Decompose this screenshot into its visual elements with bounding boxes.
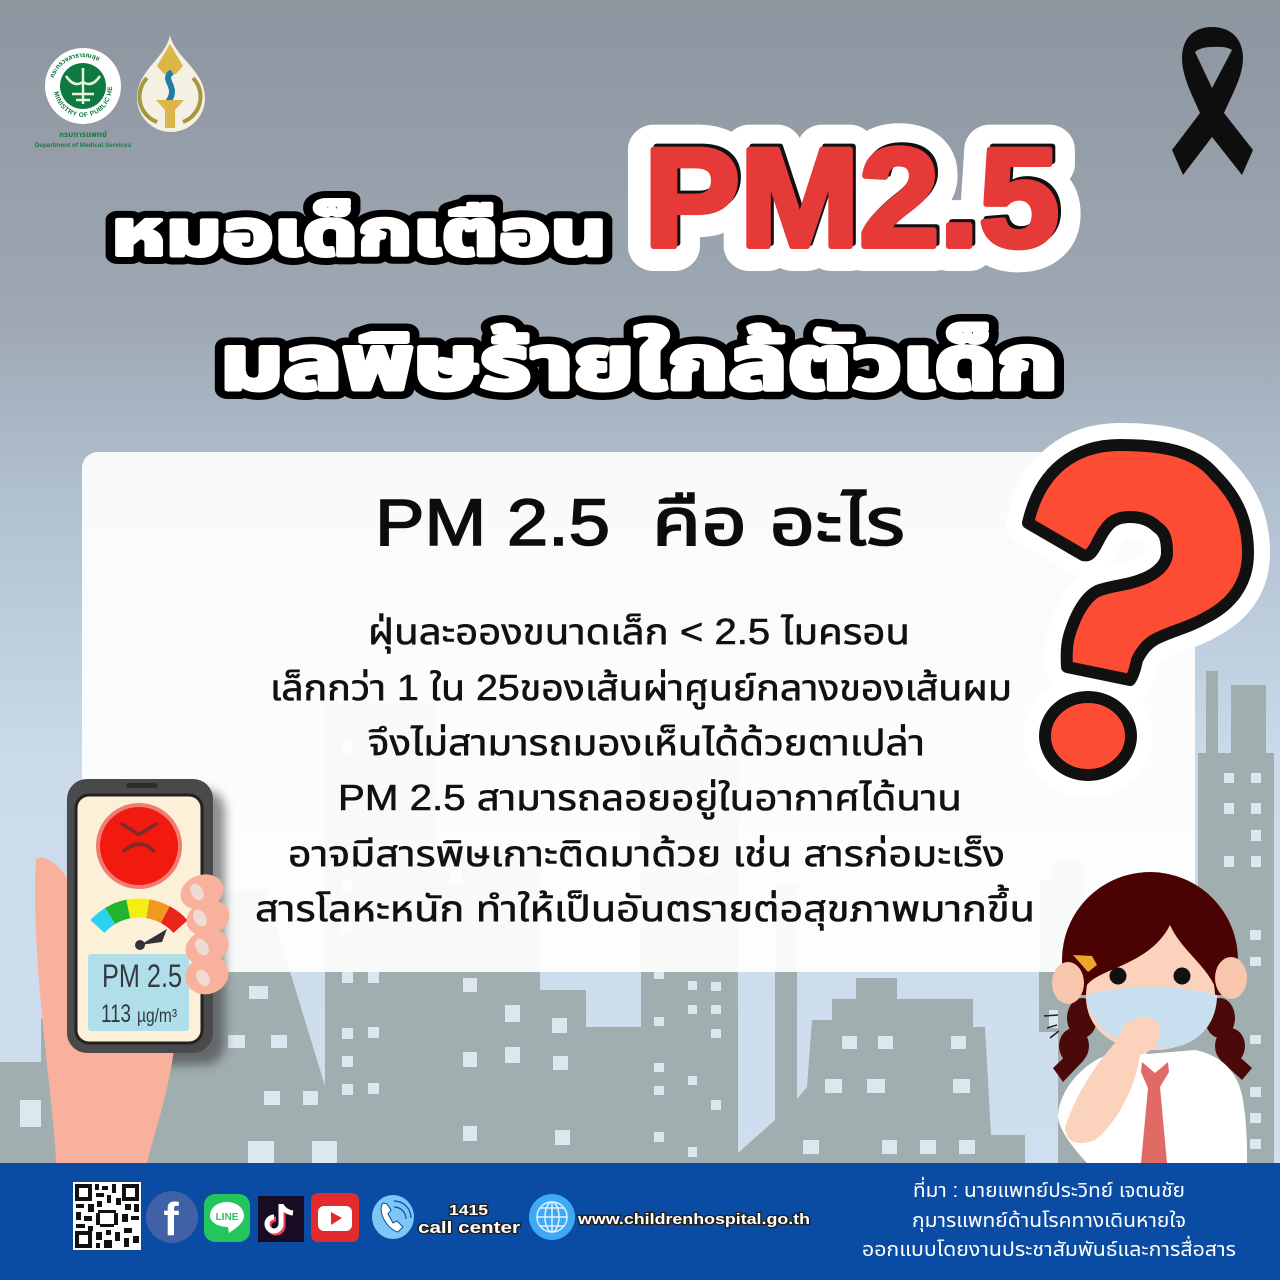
hand xyxy=(35,858,175,1163)
icon: facebook: f xyxy=(163,1193,179,1245)
reading text: µg/m³ xyxy=(137,1006,177,1027)
gauge needle xyxy=(135,929,167,950)
body text: สารโลหะหนัก ทำให้เป็นอันตรายต่อสุขภาพมากขึ้น xyxy=(255,884,1035,930)
icon: globe xyxy=(529,1194,575,1240)
body text xyxy=(255,611,1035,930)
title line 2: harmful pollution near children: มลพิษร้ายใกล้ตัวเด็ก xyxy=(220,321,1058,406)
reading text: PM 2.5 xyxy=(102,958,182,994)
phone shadow xyxy=(75,790,225,1065)
footer band xyxy=(0,1163,1280,1280)
source credit: กุมารแพทย์ด้านโรคทางเดินหายใจ xyxy=(912,1209,1186,1232)
shirt xyxy=(1058,1050,1247,1163)
icon: call center phone xyxy=(372,1195,414,1239)
body text: อาจมีสารพิษเกาะติดมาด้วย เช่น สารก่อมะเร็ง xyxy=(288,833,1005,874)
ears xyxy=(1052,962,1084,1004)
panel: PM 2.5 explanation xyxy=(82,452,1195,972)
reading box xyxy=(88,954,189,1031)
source credit: ออกแบบโดยงานประชาสัมพันธ์และการสื่อสาร xyxy=(862,1235,1236,1261)
reading text: 113 xyxy=(101,1000,131,1028)
title line 1: doctor warns: หมอเด็กเตือน xyxy=(111,197,607,269)
icon: YouTube xyxy=(311,1193,359,1242)
title: PM2.5: PM2.5 xyxy=(647,116,1062,273)
eyes xyxy=(1110,968,1126,984)
logo: Ministry of Public Health xyxy=(35,48,132,149)
icon: TikTok xyxy=(258,1196,304,1242)
website: www.childrenhospital.go.th xyxy=(577,1211,810,1228)
city skyline xyxy=(0,671,1274,1163)
cough lines xyxy=(1044,1015,1059,1038)
call center text: 1415 xyxy=(449,1202,488,1219)
title line 2: harmful pollution near children: มลพิษร้ายใกล้ตัวเด็ก xyxy=(220,321,1058,406)
air quality gauge xyxy=(97,908,181,926)
tie xyxy=(1141,1062,1169,1163)
hair clip xyxy=(1073,955,1097,972)
heading: what is PM 2.5: คือ อะไร xyxy=(652,485,905,559)
icon: black mourning ribbon xyxy=(1172,27,1253,175)
arm and hand xyxy=(1065,1017,1160,1143)
hair xyxy=(1062,872,1238,995)
icon: question mark xyxy=(1028,445,1248,775)
reading text xyxy=(101,958,182,1028)
illustration: girl with mask coughing xyxy=(1044,872,1252,1163)
body text: PM 2.5 สามารถลอยอยู่ในอากาศได้นาน xyxy=(338,777,962,819)
building windows xyxy=(20,740,1261,1163)
title line 1: doctor warns: หมอเด็กเตือน xyxy=(111,197,607,269)
logo: hospital drop xyxy=(137,35,205,132)
angry face xyxy=(98,805,180,887)
source credit: ที่มา : นายแพทย์ประวิทย์ เจตนชัย xyxy=(913,1176,1185,1202)
icon: LINE: LINE xyxy=(216,1212,239,1223)
braids xyxy=(1053,998,1252,1082)
logo: Ministry of Public Health: กรมการแพทย์ xyxy=(59,130,107,139)
source credit xyxy=(862,1176,1236,1261)
icon: facebook xyxy=(146,1191,198,1245)
title: PM2.5: PM2.5 xyxy=(644,119,1059,276)
title xyxy=(111,116,1062,406)
icon: LINE xyxy=(204,1194,250,1242)
logo: Ministry of Public Health: Department of Medical Services xyxy=(35,142,132,149)
heading: what is PM 2.5 xyxy=(375,485,905,559)
body text: เล็กกว่า 1 ใน 25ของเส้นผ่าศูนย์กลางของเส้นผม xyxy=(270,667,1012,709)
call center text xyxy=(418,1202,520,1237)
heading: what is PM 2.5: PM 2.5 xyxy=(375,485,610,559)
face mask xyxy=(1086,986,1217,1048)
fingers xyxy=(176,869,234,1000)
illustration: hand holding phone xyxy=(35,779,234,1163)
face xyxy=(1086,925,1215,1050)
phone body xyxy=(67,779,213,1053)
QR code xyxy=(73,1182,141,1250)
title: PM2.5: PM2.5 xyxy=(644,119,1059,276)
call center text: call center xyxy=(418,1218,520,1237)
body text: ฝุ่นละอองขนาดเล็ก < 2.5 ไมครอน xyxy=(368,611,910,653)
logo: Ministry of Public Health: กระทรวงสาธารณสุข xyxy=(50,53,100,78)
body text: จึงไม่สามารถมองเห็นได้ด้วยตาเปล่า xyxy=(368,722,925,763)
